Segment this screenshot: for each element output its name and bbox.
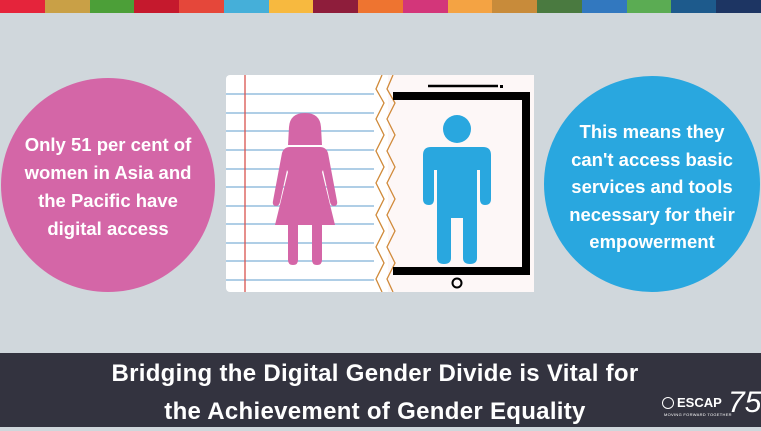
title: Bridging the Digital Gender Divide is Vital for — [111, 360, 639, 387]
logo: ESCAP 75: ESCAP — [677, 395, 722, 410]
logo: ESCAP 75 — [662, 386, 761, 419]
blue circle callout: services and tools — [571, 176, 733, 197]
woman icon — [273, 113, 337, 265]
pink circle callout: Only 51 per cent of — [25, 134, 191, 155]
logo: ESCAP 75: MOVING FORWARD TOGETHER — [664, 412, 732, 417]
blue circle callout — [544, 76, 760, 292]
pink circle callout — [1, 78, 215, 292]
notebook lines — [226, 94, 374, 280]
tablet area — [388, 75, 534, 292]
zigzag tear — [374, 75, 384, 292]
central illustration: paper vs tablet — [226, 75, 534, 292]
blue circle callout: necessary for their — [569, 204, 735, 224]
SDG color bar — [0, 0, 761, 13]
pink circle callout: women in Asia and — [25, 162, 191, 183]
blue circle callout: This means they — [580, 121, 724, 142]
blue circle callout: empowerment — [589, 231, 715, 252]
blue circle callout: can't access basic — [571, 148, 733, 170]
title: the Achievement of Gender Equality — [164, 398, 586, 425]
tablet frame — [393, 92, 530, 100]
pink circle callout: digital access — [47, 218, 169, 239]
logo: ESCAP 75: 75 — [728, 386, 761, 419]
man icon — [423, 115, 491, 264]
bottom banner with title — [0, 353, 761, 427]
pink circle callout: the Pacific have — [38, 190, 178, 211]
title — [111, 360, 639, 425]
